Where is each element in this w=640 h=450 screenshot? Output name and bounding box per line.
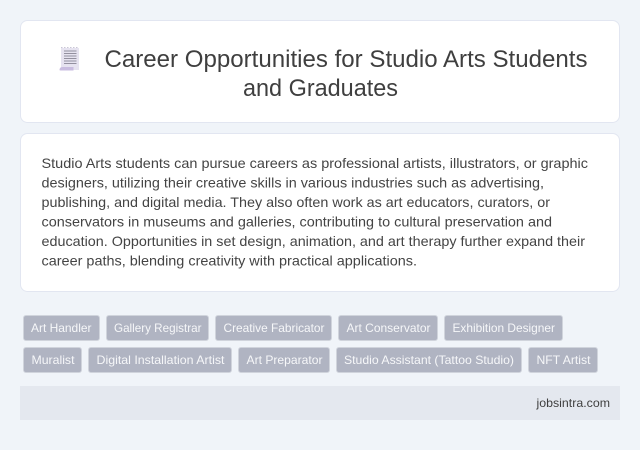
tag: Art Handler: Art Handler (31, 321, 92, 335)
panel: description card (20, 134, 620, 292)
tags (24, 316, 598, 372)
tag: Exhibition Designer: Exhibition Designer (452, 321, 555, 335)
tag: Gallery Registrar (106, 316, 208, 340)
tag: Art Conservator (338, 316, 438, 340)
footer text: site name: jobsintra.com (535, 396, 610, 410)
tag: NFT Artist: NFT Artist (536, 353, 591, 367)
title: Career Opportunities for Studio Arts Students (104, 46, 588, 73)
description text: designers, utilizing their creative skills in various industries such as advertising, (42, 174, 544, 190)
tag: Gallery Registrar: Gallery Registrar (114, 321, 202, 335)
description text: career paths, blending creativity with practical applications. (42, 252, 417, 268)
tag: Creative Fabricator (216, 316, 332, 340)
tag: Muralist (24, 348, 82, 372)
tag: NFT Artist (528, 348, 598, 372)
panel: header card (20, 20, 620, 122)
tag: Studio Assistant (Tattoo Studio): Studio Assistant (Tattoo Studio) (344, 353, 514, 367)
description text: education. Opportunities in set design, animation, and art therapy further expand their (42, 233, 585, 249)
icon: document scroll (60, 48, 79, 70)
tag: Art Preparator (238, 348, 330, 372)
description text (42, 155, 588, 268)
tag: Exhibition Designer (444, 316, 562, 340)
tag: Digital Installation Artist (88, 348, 232, 372)
description text: publishing, and digital media. They also often work as art educators, curators, or (42, 194, 550, 210)
tag: Art Conservator: Art Conservator (346, 321, 431, 335)
footer bar (20, 386, 620, 420)
tag: Creative Fabricator: Creative Fabricator (224, 321, 324, 335)
title (104, 46, 588, 102)
tag: Art Preparator: Art Preparator (246, 353, 322, 367)
tag: Art Handler (24, 316, 100, 340)
description text: conservators in museums and galleries, contributing to cultural preservation and (42, 214, 552, 230)
tag: Studio Assistant (Tattoo Studio) (336, 348, 522, 372)
tag: Muralist: Muralist (32, 353, 75, 367)
tag: Digital Installation Artist: Digital Installation Artist (96, 353, 225, 367)
title: and Graduates (243, 75, 398, 102)
description text: Studio Arts students can pursue careers as professional artists, illustrators, or graphic (42, 155, 588, 171)
